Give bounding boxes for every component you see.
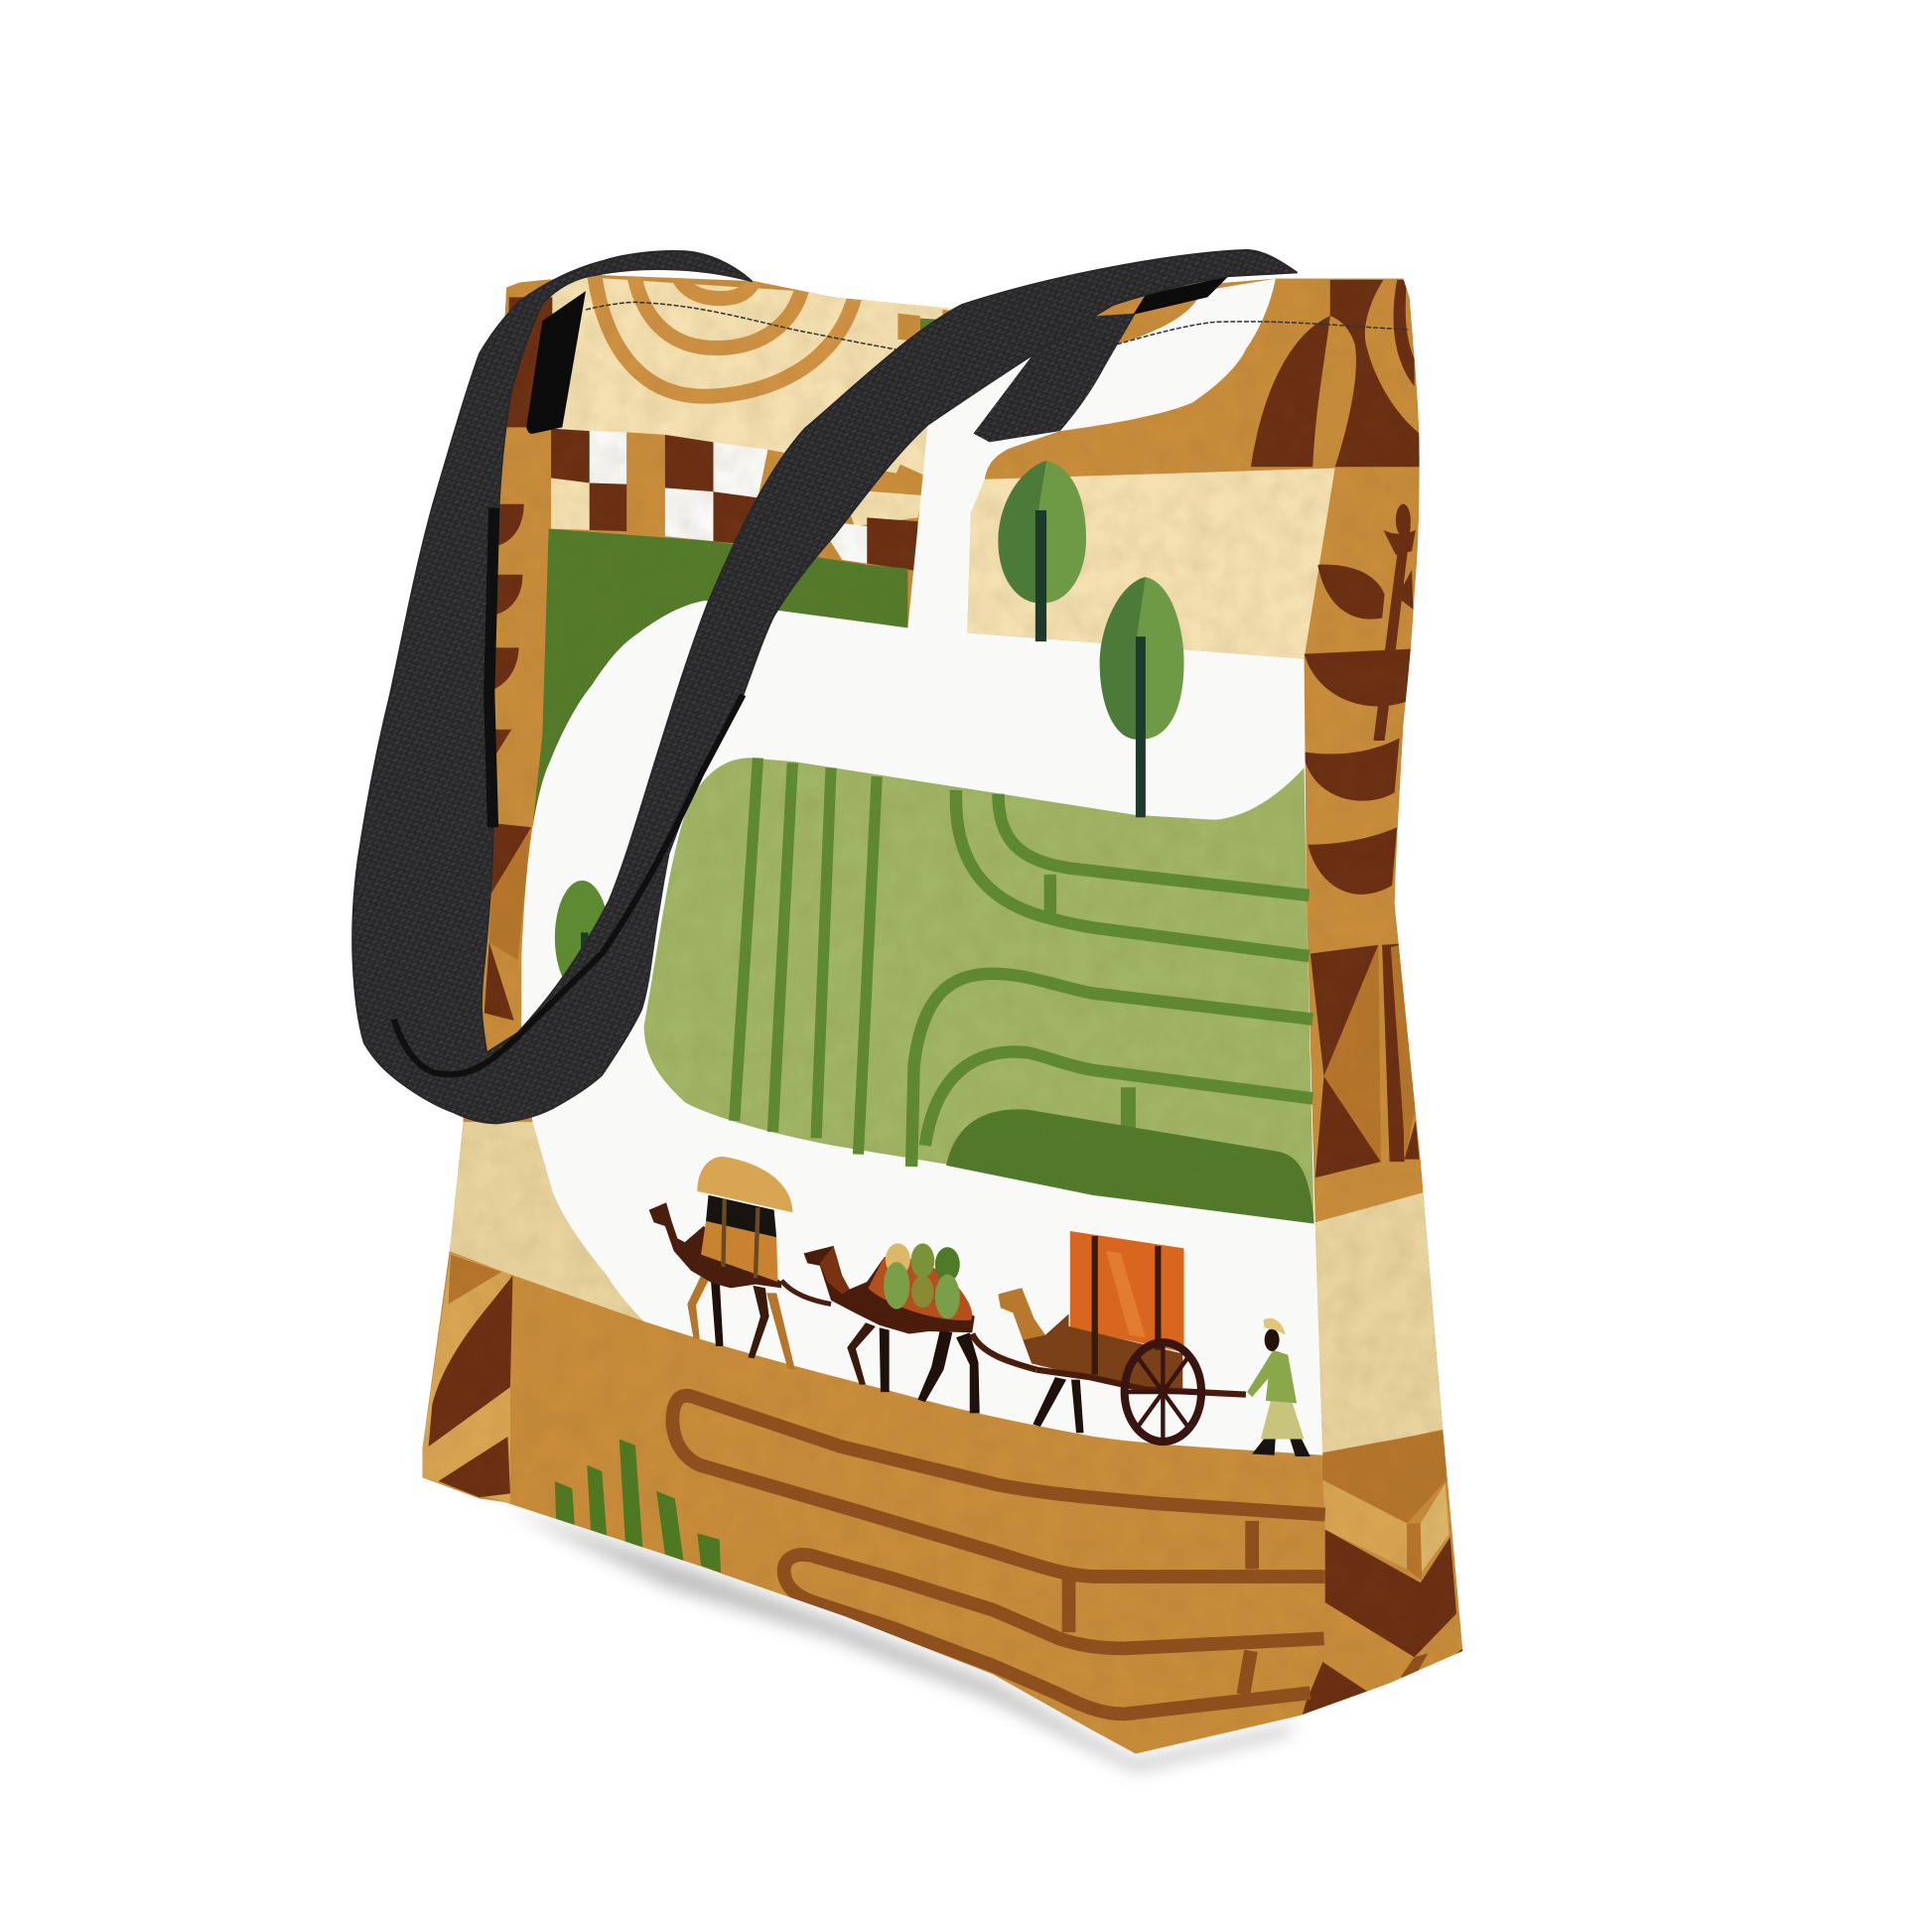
panel: left ochre strip	[459, 287, 552, 1122]
camel body	[998, 1288, 1182, 1392]
panel: checker row	[551, 429, 927, 571]
back gap shadow	[1133, 276, 1228, 315]
camel 3 with cart	[998, 1231, 1246, 1442]
strip top brown arc	[506, 297, 552, 427]
base ochre fabric	[409, 260, 1486, 1783]
tree 1	[998, 461, 1086, 641]
strap tab left	[526, 291, 586, 434]
strap inner fold shadow	[394, 695, 743, 1074]
panel: cream lower left	[449, 1122, 644, 1321]
panel: dark green field	[532, 529, 907, 827]
panel: ochre base with line art	[505, 1275, 1325, 1758]
small green and ochre blocks at top	[897, 314, 920, 342]
panel: cream top with rainbow arcs	[551, 272, 991, 520]
panel: side gusset	[1251, 280, 1467, 1722]
cargo	[701, 1221, 777, 1282]
panel: light green terraced field	[631, 743, 1325, 1238]
strip half-discs	[484, 504, 531, 1021]
trees	[555, 461, 1184, 995]
green bars	[555, 1440, 721, 1573]
tree 2	[1100, 577, 1184, 817]
driver	[1247, 1318, 1311, 1456]
camel 2 with green sacks	[804, 1243, 1036, 1413]
gusset plant motif	[1303, 504, 1416, 895]
saddle cloth	[868, 1257, 972, 1320]
rope	[781, 1281, 831, 1305]
panel: ochre hill top right	[985, 279, 1425, 480]
tree 3	[554, 880, 606, 977]
caravan: camels, cart and driver	[649, 1157, 1311, 1456]
curved terrace lines	[911, 790, 1312, 1167]
cart pole	[1036, 1370, 1246, 1395]
fabric texture	[423, 278, 1439, 1647]
panel: cream meadow	[967, 469, 1335, 659]
gusset top leaf motif	[1251, 280, 1425, 467]
gusset triangles	[1311, 944, 1420, 1177]
canopy	[697, 1157, 792, 1212]
tote bag body	[409, 260, 1486, 1783]
orange load	[1070, 1231, 1184, 1352]
stitching line	[586, 302, 1408, 349]
gusset bottom chevrons	[1301, 1431, 1467, 1716]
sacks	[886, 1243, 910, 1276]
rope	[972, 1333, 1036, 1370]
wheel	[1125, 1342, 1201, 1442]
rainbow arcs	[595, 272, 855, 396]
camel 1 with canopy	[649, 1157, 831, 1370]
panel: white road band	[521, 279, 1322, 1455]
field texture	[698, 800, 1297, 1056]
black shoulder strap handle	[352, 250, 1297, 1123]
vertical field stripes	[735, 758, 877, 1155]
ground shadow	[505, 1507, 1301, 1771]
main strap loop	[352, 250, 1297, 1123]
gusset cream band	[1315, 1192, 1445, 1455]
brown hairpin lines	[672, 1396, 1325, 1714]
strap tab right	[973, 314, 1136, 442]
dark green mound	[946, 1109, 1314, 1223]
panel: lower left corner motif	[422, 1253, 512, 1503]
